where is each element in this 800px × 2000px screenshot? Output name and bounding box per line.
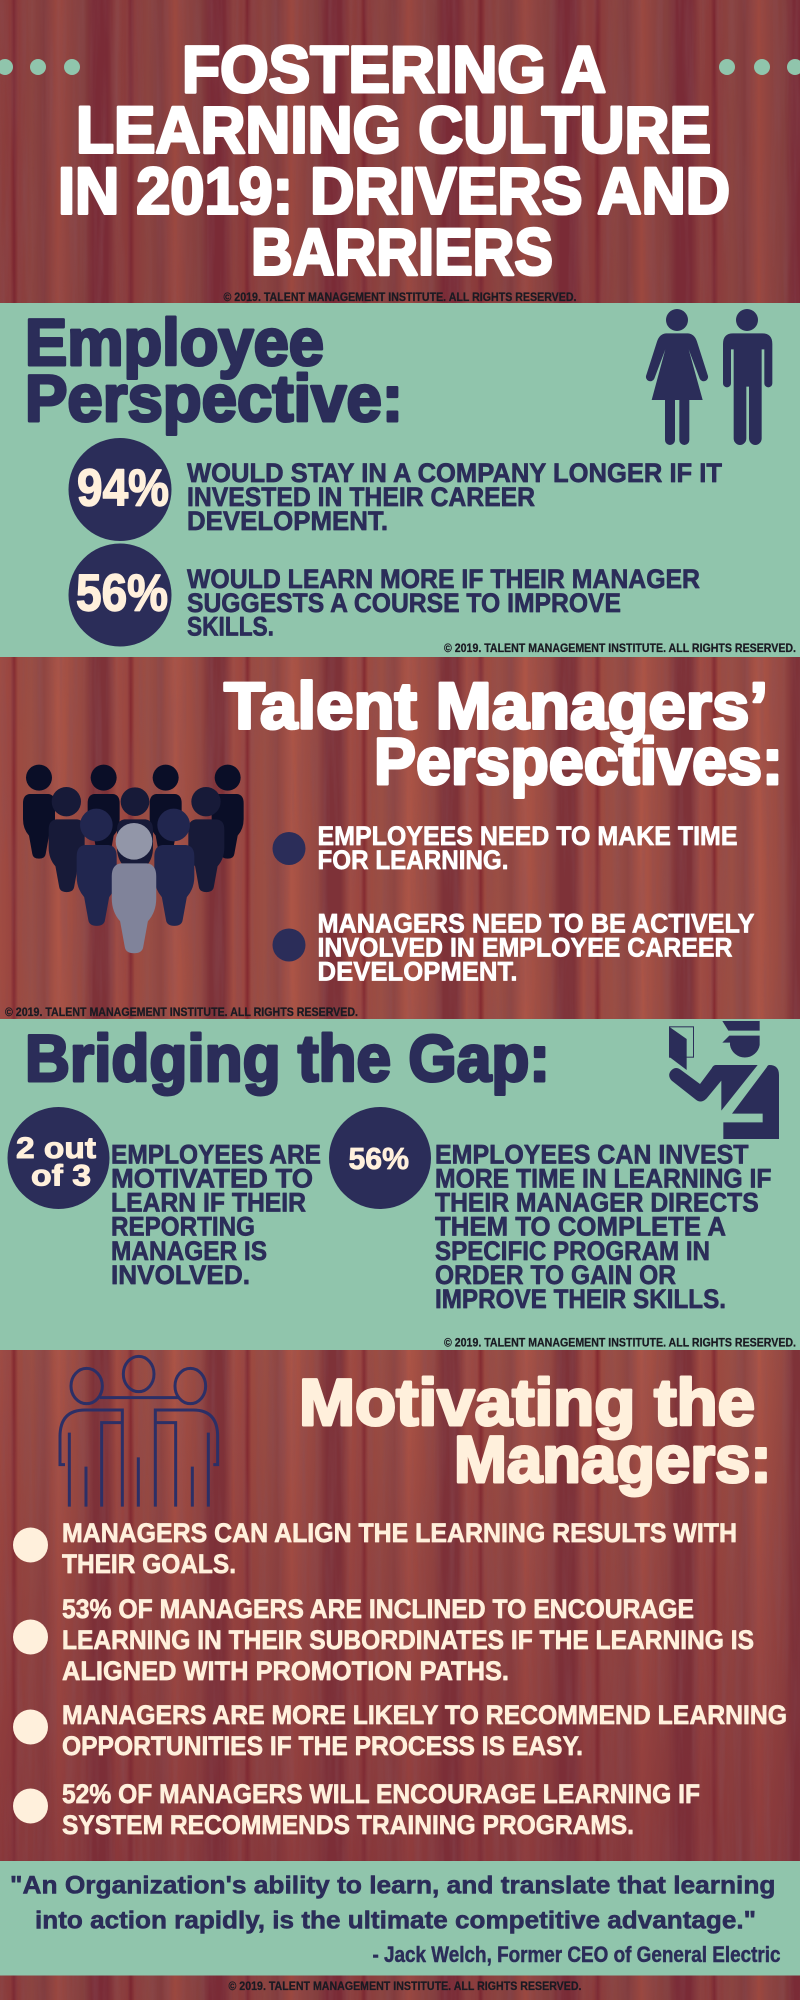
text: 53% of managers: ALIGNED WITH PROMOTION PATHS. xyxy=(62,1656,509,1686)
bullet xyxy=(272,928,306,962)
stat: 2 out of 3 xyxy=(8,1107,110,1209)
text: stay longer xyxy=(187,458,722,536)
text: make time xyxy=(318,821,738,875)
heading: Managers: xyxy=(454,1422,772,1496)
decorative dots right xyxy=(719,59,800,75)
text: easy process xyxy=(62,1700,787,1761)
text: align results: MANAGERS CAN ALIGN THE LEARNING RESULTS WITH xyxy=(62,1518,737,1548)
stat: 56% xyxy=(329,1107,431,1209)
panel: quote xyxy=(0,1861,800,1976)
text: 52% of managers: SYSTEM RECOMMENDS TRAINING PROGRAMS. xyxy=(62,1810,634,1840)
text: align results: THEIR GOALS. xyxy=(62,1549,236,1579)
stat: 94%: 94% xyxy=(77,460,169,518)
panel: motivating the managers xyxy=(13,1356,787,1840)
text: invest more time: THEIR MANAGER DIRECTS xyxy=(435,1188,759,1218)
title: BARRIERS xyxy=(251,214,553,288)
stat: 2 out of 3: of 3 xyxy=(31,1160,91,1192)
heading xyxy=(299,1365,772,1496)
copyright: © 2019. TALENT MANAGEMENT INSTITUTE. ALL RIGHTS RESERVED. xyxy=(224,292,576,304)
text: learn more: WOULD LEARN MORE IF THEIR MANAGER xyxy=(187,564,700,594)
text: stay longer: WOULD STAY IN A COMPANY LONGER IF IT xyxy=(187,458,722,488)
heading: Motivating the xyxy=(299,1365,755,1439)
panel: title header xyxy=(0,32,800,304)
text: stay longer: DEVELOPMENT. xyxy=(187,506,388,536)
text: learn more: SKILLS. xyxy=(187,612,274,642)
text: motivated to learn xyxy=(111,1140,321,1290)
footer copyright: © 2019. TALENT MANAGEMENT INSTITUTE. ALL RIGHTS RESERVED. xyxy=(228,1981,582,1993)
heading xyxy=(224,668,783,798)
text: learn more: SUGGESTS A COURSE TO IMPROVE xyxy=(187,588,621,618)
title: FOSTERING A xyxy=(182,32,606,106)
stat: 56%: 56% xyxy=(348,1141,409,1176)
stat: 56%: 56% xyxy=(76,564,168,622)
stat: 94% xyxy=(68,438,172,541)
quote text: "An Organization's ability to learn, and translate that learning xyxy=(10,1872,776,1900)
bullet xyxy=(272,832,306,865)
copyright: © 2019. TALENT MANAGEMENT INSTITUTE. ALL RIGHTS RESERVED. xyxy=(5,1007,358,1019)
panel: talent managers' perspectives xyxy=(5,668,783,1019)
text: invest more time: ORDER TO GAIN OR xyxy=(435,1260,676,1290)
text: align results xyxy=(62,1518,737,1579)
quote text: into action rapidly, is the ultimate competitive advantage." xyxy=(35,1906,756,1934)
text: 52% of managers xyxy=(62,1779,700,1840)
stat: 56% xyxy=(68,544,172,646)
text: invest more time: MORE TIME IN LEARNING IF xyxy=(435,1164,772,1194)
heading: Employee xyxy=(25,305,324,379)
text: managers involved: MANAGERS NEED TO BE ACTIVELY xyxy=(318,908,754,938)
text: invest more time: IMPROVE THEIR SKILLS. xyxy=(435,1284,726,1314)
panel: employee perspective xyxy=(0,303,800,657)
quote text xyxy=(10,1872,776,1934)
title: LEARNING CULTURE xyxy=(76,92,711,166)
text: managers involved xyxy=(318,908,754,986)
text: 53% of managers: 53% OF MANAGERS ARE INCLINED TO ENCOURAGE xyxy=(62,1594,694,1624)
decorative dots left xyxy=(0,59,80,75)
title: IN 2019: DRIVERS AND xyxy=(58,154,730,228)
text: motivated to learn: LEARN IF THEIR xyxy=(111,1188,306,1218)
text: 52% of managers: 52% OF MANAGERS WILL ENCOURAGE LEARNING IF xyxy=(62,1779,700,1809)
panel: bridging the gap xyxy=(0,1019,800,1350)
text: invest more time xyxy=(435,1140,772,1314)
text: 53% of managers: LEARNING IN THEIR SUBORDINATES IF THE LEARNING IS xyxy=(62,1625,754,1655)
heading xyxy=(25,305,403,435)
icon: officer reading document xyxy=(669,1021,779,1139)
icon: three people linked xyxy=(60,1356,218,1507)
bullet xyxy=(13,1788,48,1824)
text: make time: FOR LEARNING. xyxy=(318,845,508,875)
text: motivated to learn: EMPLOYEES ARE xyxy=(111,1140,321,1170)
text: make time: EMPLOYEES NEED TO MAKE TIME xyxy=(318,821,738,851)
icon: group of people xyxy=(23,765,244,953)
heading: Perspectives: xyxy=(374,724,783,798)
heading: Bridging the Gap: xyxy=(25,1021,550,1095)
title xyxy=(58,32,730,288)
text: learn more xyxy=(187,564,700,642)
text: 53% of managers xyxy=(62,1594,754,1686)
bullet xyxy=(13,1710,48,1744)
heading: Perspective: xyxy=(25,361,403,435)
text: easy process: OPPORTUNITIES IF THE PROCESS IS EASY. xyxy=(62,1731,583,1761)
icon: woman and man xyxy=(646,309,772,445)
heading: Talent Managers’ xyxy=(224,668,768,742)
bullet xyxy=(13,1620,48,1654)
stat: 2 out of 3: 2 out xyxy=(16,1132,96,1165)
bullet xyxy=(13,1528,48,1562)
text: invest more time: EMPLOYEES CAN INVEST xyxy=(435,1140,749,1170)
text: invest more time: SPECIFIC PROGRAM IN xyxy=(435,1236,710,1266)
text: motivated to learn: MANAGER IS xyxy=(111,1236,267,1266)
text: managers involved: INVOLVED IN EMPLOYEE CAREER xyxy=(318,932,732,962)
text: managers involved: DEVELOPMENT. xyxy=(318,956,518,986)
text: stay longer: INVESTED IN THEIR CAREER xyxy=(187,482,535,512)
text: invest more time: THEM TO COMPLETE A xyxy=(435,1212,726,1242)
text: motivated to learn: REPORTING xyxy=(111,1212,255,1242)
text: motivated to learn: MOTIVATED TO xyxy=(111,1164,313,1194)
text: motivated to learn: INVOLVED. xyxy=(111,1260,250,1290)
